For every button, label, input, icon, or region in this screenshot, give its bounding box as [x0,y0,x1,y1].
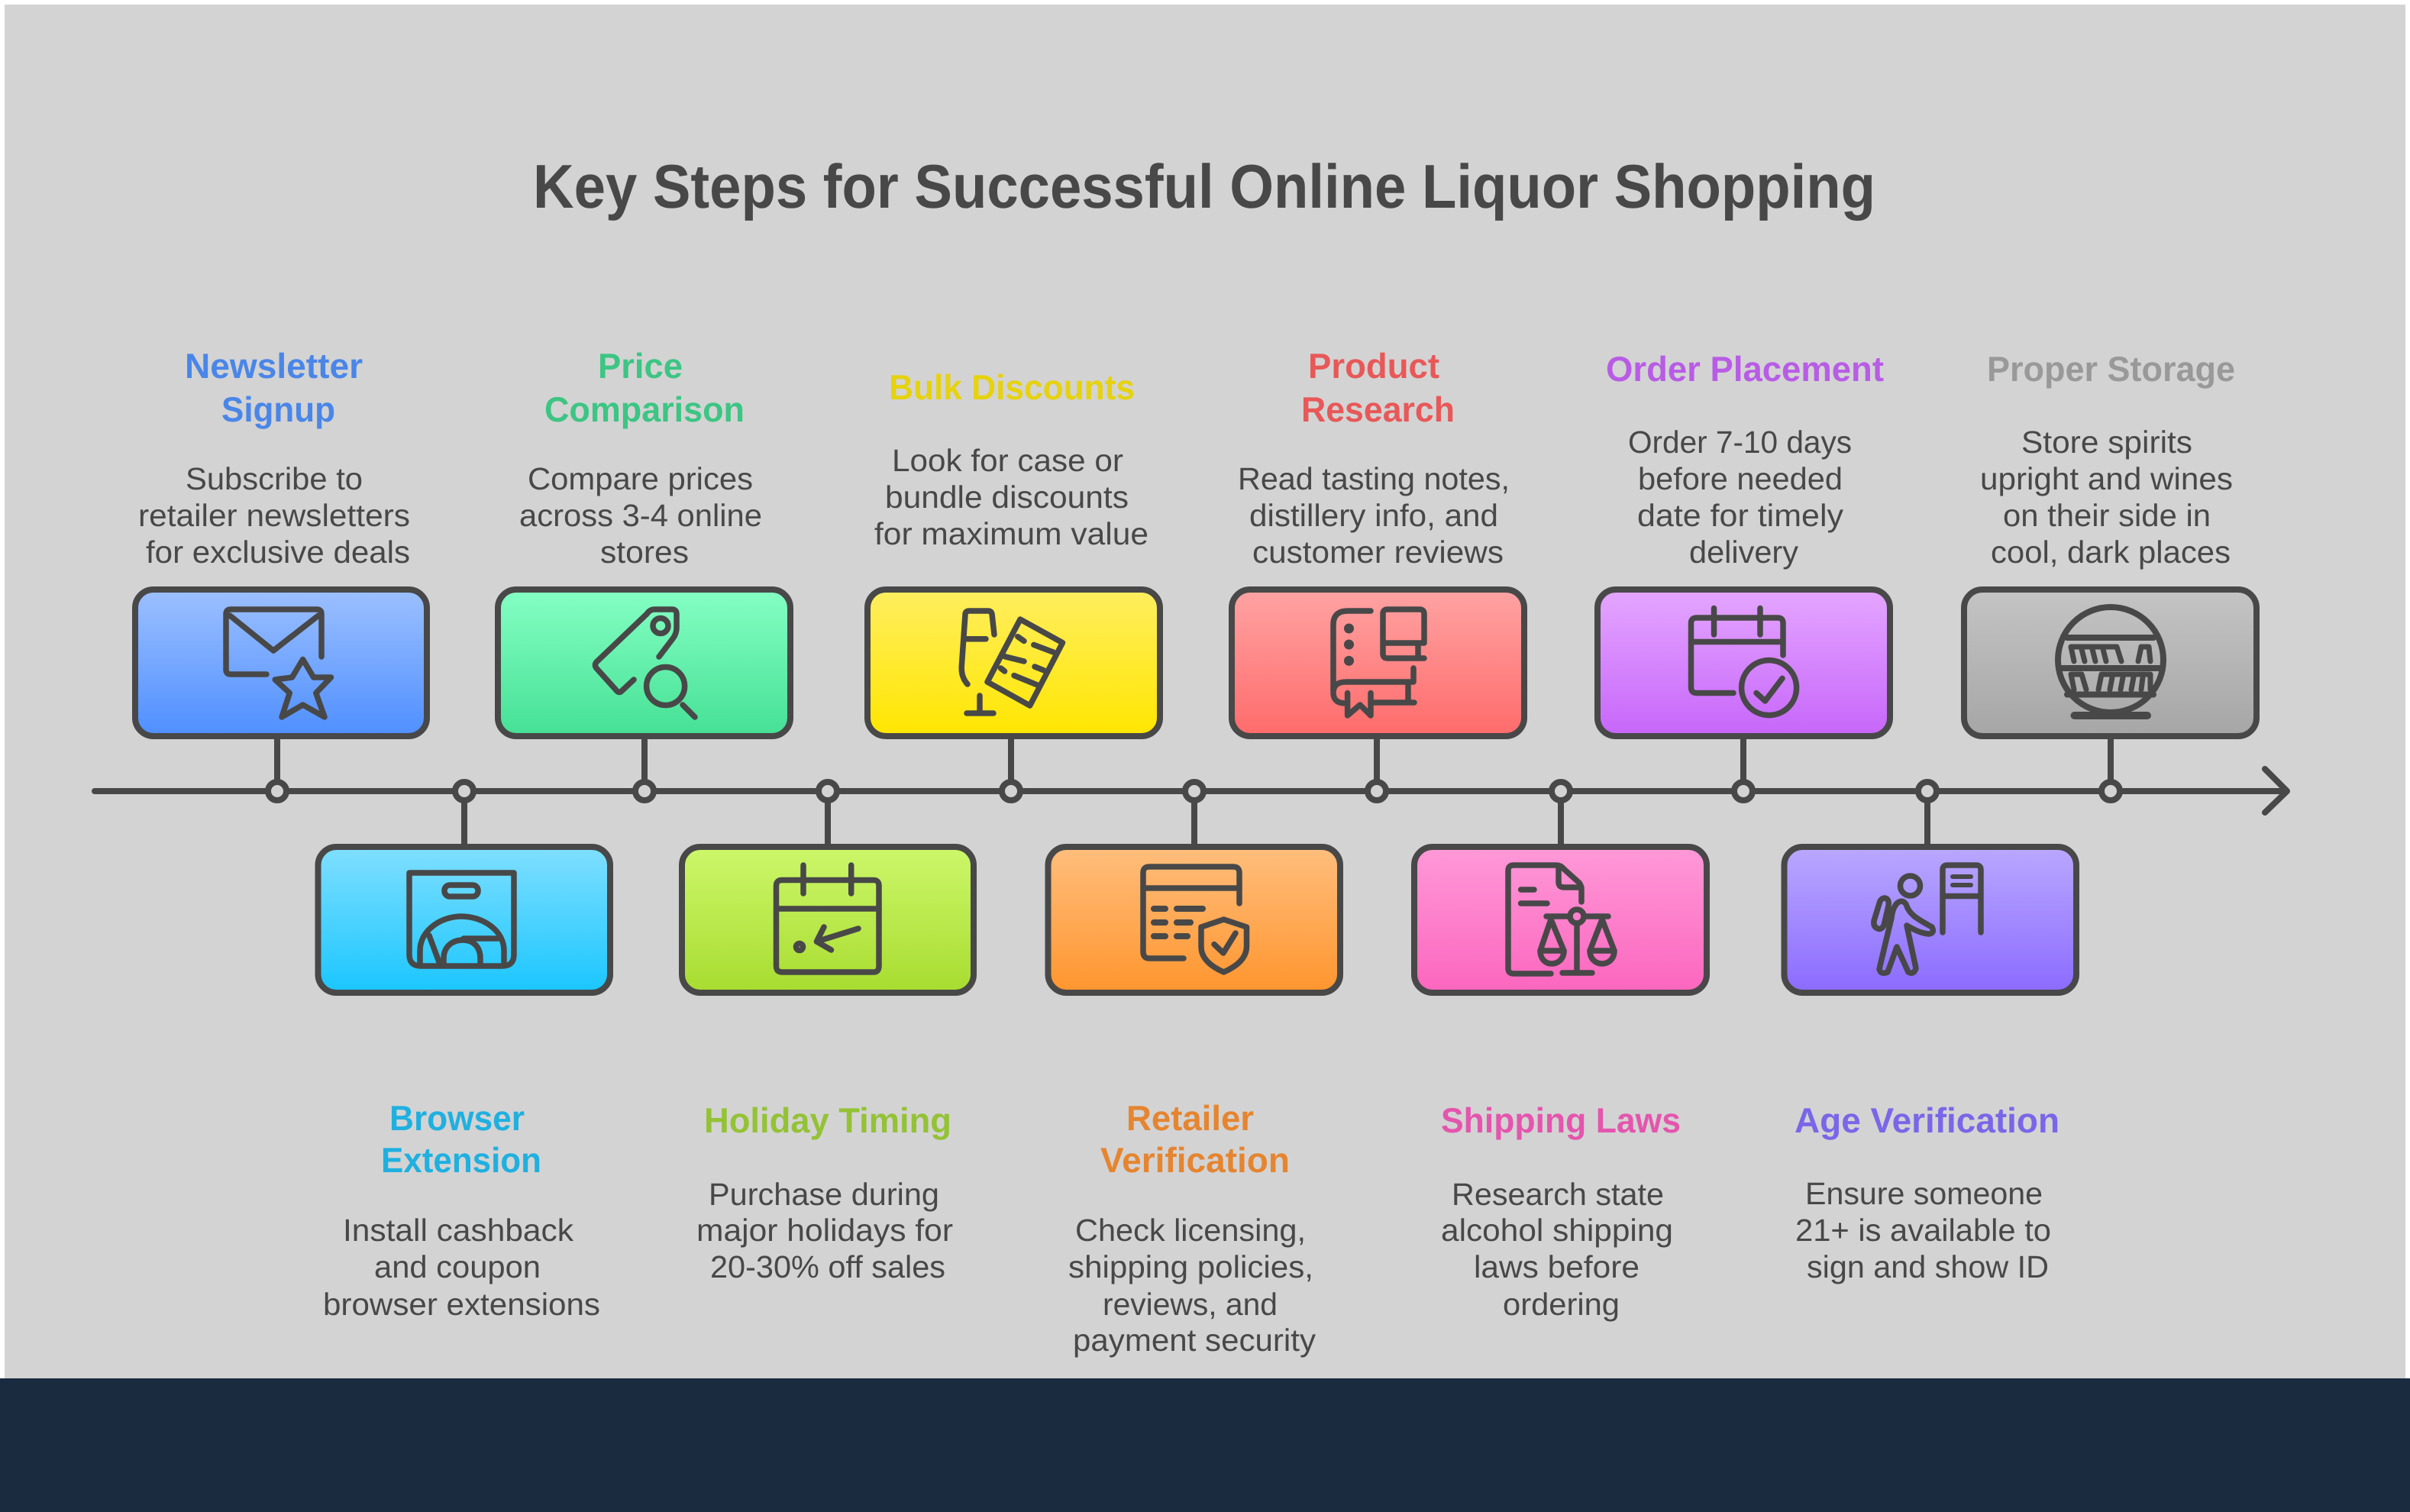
description: Browser Extension [323,1213,600,1322]
marker [2101,782,2120,800]
heading: Newsletter Signup: Newsletter [185,346,363,386]
connector [274,738,280,791]
description: Product Research: customer reviews [1252,535,1504,570]
description: Retailer Verification: shipping policies, [1068,1249,1313,1284]
heading: Browser Extension: Extension [381,1140,541,1180]
description: Age Verification [1795,1176,2051,1284]
heading: Newsletter Signup: Signup [221,389,335,429]
description: Shipping Laws: Research state [1452,1177,1664,1212]
icon: calendar with check [1691,608,1797,716]
heading: Product Research: Product [1308,346,1439,386]
description: Proper Storage [1980,425,2233,570]
footer band [0,1378,2410,1512]
description: Order Placement: Order 7-10 days [1628,425,1852,460]
description: Order Placement: before needed [1638,461,1843,496]
connector [1374,738,1380,791]
card [1964,590,2257,736]
step 9: Order Placement [1598,349,1890,800]
marker [1185,782,1203,800]
description: Browser Extension: browser extensions [323,1287,600,1322]
description: Bulk Discounts: bundle discounts [885,480,1129,515]
description: Product Research [1238,461,1510,570]
icon: price tag with magnifier [596,609,695,717]
heading: Price Comparison: Comparison [544,389,745,429]
description: Price Comparison: across 3-4 online [519,498,762,533]
connector [1924,791,1930,845]
heading: Order Placement: Order Placement [1606,349,1884,389]
description: Proper Storage: Store spirits [2021,425,2192,460]
description: Proper Storage: cool, dark places [1991,535,2231,570]
heading: Product Research [1301,346,1455,429]
heading: Retailer Verification: Retailer [1126,1098,1254,1138]
description: Price Comparison: Compare prices [528,461,753,496]
description: Shipping Laws: ordering [1503,1287,1620,1322]
description: Order Placement [1628,425,1852,570]
card [1232,590,1524,736]
description: Bulk Discounts [874,443,1148,551]
step 5: Bulk Discounts [867,367,1160,800]
description: Age Verification: Ensure someone [1805,1176,2043,1211]
marker [455,782,473,800]
step 7: Product Research [1232,346,1524,800]
connector [1558,791,1564,845]
heading: Bulk Discounts: Bulk Discounts [889,367,1135,407]
description: Browser Extension: and coupon [374,1249,541,1284]
connector [1740,738,1746,791]
marker [819,782,837,800]
icon: glass and price list [961,611,1063,713]
description: Retailer Verification: reviews, and [1103,1287,1278,1322]
marker [1552,782,1570,800]
title: Key Steps for Successful Online Liquor Shopping [533,153,1875,221]
heading: Age Verification: Age Verification [1795,1100,2059,1140]
icon: envelope with star [226,609,331,717]
card [867,590,1160,736]
step 6: Retailer Verification [1048,782,1340,1358]
card [498,590,790,736]
heading: Price Comparison [544,346,745,429]
heading: Newsletter Signup [185,346,363,429]
step 11: Proper Storage [1964,349,2257,800]
step 3: Price Comparison [498,346,790,800]
description: Browser Extension: Install cashback [343,1213,574,1248]
connector [641,738,648,791]
description: Holiday Timing: Purchase during [709,1177,939,1212]
connector [1008,738,1014,791]
timeline axis with arrow [95,769,2287,813]
connector [825,791,831,845]
connector [1191,791,1197,845]
connector [461,791,467,845]
card [682,847,974,993]
card [1784,847,2076,993]
description: Newsletter Signup: Subscribe to [186,461,363,496]
description: Shipping Laws: laws before [1474,1249,1640,1284]
description: Shipping Laws [1441,1177,1673,1322]
icon: person walking to ID sign [1874,865,1981,973]
card [135,590,427,736]
description: Newsletter Signup: for exclusive deals [146,535,410,570]
description: Retailer Verification [1068,1213,1316,1358]
heading: Holiday Timing: Holiday Timing [704,1100,951,1140]
heading: Retailer Verification: Verification [1100,1140,1290,1180]
icon: document with scales [1508,865,1614,974]
description: Newsletter Signup: retailer newsletters [138,498,410,533]
description: Bulk Discounts: for maximum value [874,516,1148,551]
step 8: Shipping Laws [1414,782,1707,1322]
description: Proper Storage: upright and wines [1980,461,2233,496]
description: Holiday Timing: 20-30% off sales [710,1249,945,1284]
heading: Product Research: Research [1301,389,1455,429]
heading: Retailer Verification [1100,1098,1290,1180]
card [1048,847,1340,993]
step 10: Age Verification [1784,782,2076,1284]
step 4: Holiday Timing [682,782,974,1284]
heading: Shipping Laws: Shipping Laws [1441,1100,1681,1140]
description: Order Placement: delivery [1689,535,1799,570]
description: Product Research: Read tasting notes, [1238,461,1510,496]
icon: books with bookmark [1333,609,1424,716]
icon: browser extension [409,873,514,966]
heading: Proper Storage: Proper Storage [1987,349,2235,389]
icon: calendar with arrow [776,865,879,972]
description: Order Placement: date for timely [1637,498,1844,533]
description: Retailer Verification: Check licensing, [1075,1213,1306,1248]
marker [1918,782,1937,800]
step 1: Newsletter Signup [135,346,427,800]
description: Price Comparison [519,461,762,570]
heading: Browser Extension: Browser [389,1098,525,1138]
description: Shipping Laws: alcohol shipping [1441,1213,1673,1248]
description: Proper Storage: on their side in [2003,498,2211,533]
description: Retailer Verification: payment security [1073,1323,1316,1358]
description: Age Verification: sign and show ID [1807,1249,2049,1284]
description: Holiday Timing [696,1177,953,1284]
marker [635,782,654,800]
description: Product Research: distillery info, and [1249,498,1498,533]
marker [1002,782,1020,800]
card [1598,590,1890,736]
description: Bulk Discounts: Look for case or [892,443,1123,478]
connector [2108,738,2114,791]
description: Price Comparison: stores [600,535,689,570]
description: Newsletter Signup [138,461,410,570]
marker [1368,782,1386,800]
marker [1734,782,1753,800]
icon: round bottle shelf [2058,607,2163,716]
heading: Browser Extension [381,1098,541,1180]
card [1414,847,1707,993]
heading: Price Comparison: Price [598,346,683,386]
icon: checklist with shield [1143,867,1246,972]
marker [268,782,286,800]
card [318,847,610,993]
description: Holiday Timing: major holidays for [696,1213,953,1248]
description: Age Verification: 21+ is available to [1795,1213,2051,1248]
step 2: Browser Extension [318,782,610,1322]
